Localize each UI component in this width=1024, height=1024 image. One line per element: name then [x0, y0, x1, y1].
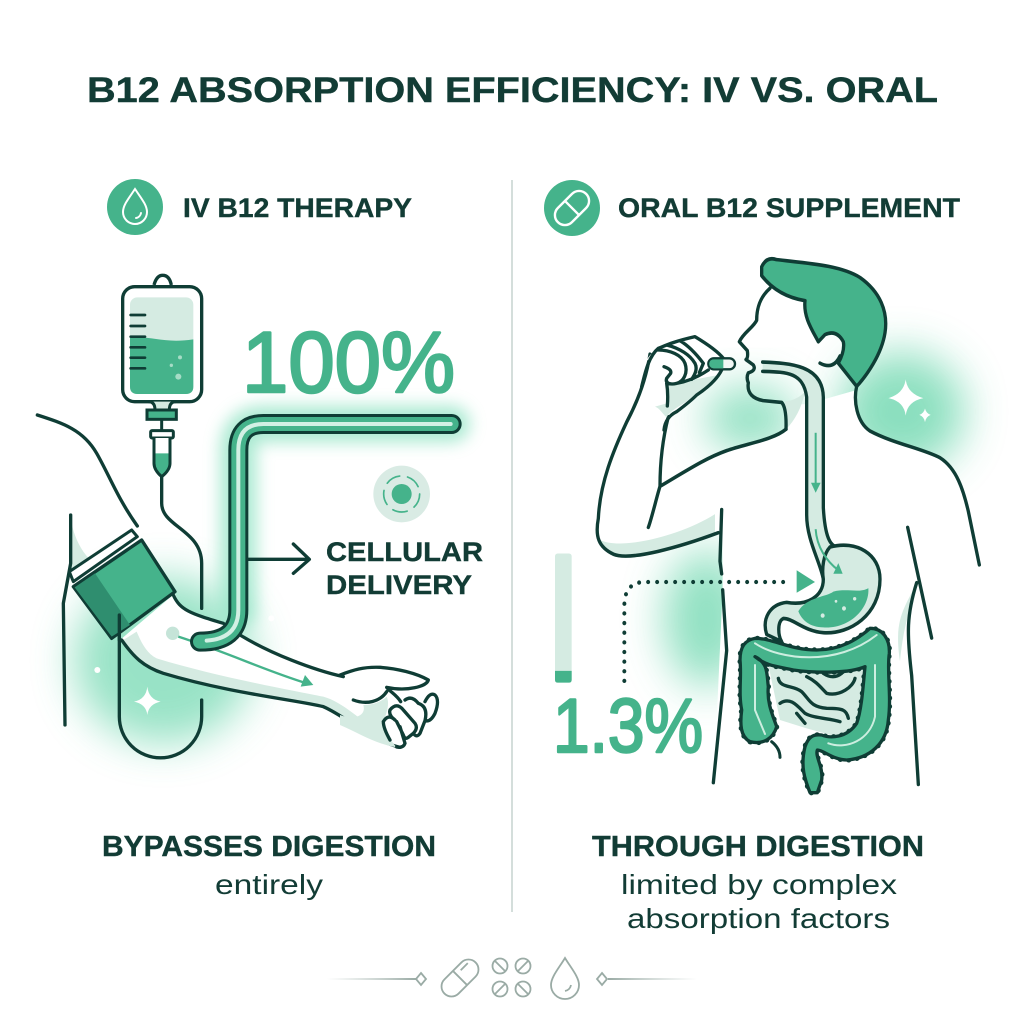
body white — [613, 390, 979, 793]
title: B12 ABSORPTION EFFICIENCY: IV VS. ORAL — [87, 71, 938, 110]
esophagus — [763, 362, 838, 579]
capsule — [708, 358, 735, 369]
icon: tablets — [492, 958, 530, 996]
label: cellular delivery: DELIVERY — [326, 570, 472, 600]
stat: 100%: 100% — [242, 315, 455, 411]
torso outlines — [713, 510, 932, 784]
illustration: person and digestive tract — [555, 259, 979, 793]
icon: capsule badge — [544, 180, 600, 236]
heading: IV B12 therapy: IV B12 THERAPY — [183, 193, 412, 223]
glow: shoulder — [838, 352, 965, 470]
body outlines — [37, 415, 137, 725]
icon: cell — [373, 466, 430, 522]
illustration: intestines — [740, 628, 890, 793]
glow: chest — [703, 386, 797, 451]
arm glow — [73, 577, 253, 743]
raised arm outline — [597, 354, 786, 556]
dots — [94, 615, 274, 673]
IV bag — [123, 275, 202, 477]
stomach — [765, 545, 880, 642]
hair — [762, 259, 886, 386]
side shade — [898, 583, 917, 661]
icon: droplet — [551, 958, 579, 999]
illustration: curled hand — [340, 667, 437, 747]
torso shade — [71, 523, 90, 572]
under-chin shade — [785, 392, 805, 429]
IV line — [119, 477, 202, 758]
caption: through digestion: limited by complex — [621, 869, 897, 900]
caption: through digestion: absorption factors — [627, 903, 890, 934]
icon: water drop badge — [107, 179, 163, 235]
arrow to cellular delivery — [248, 544, 309, 573]
panel: oral B12 supplement — [544, 180, 979, 934]
caption: through digestion — [592, 831, 924, 934]
label: cellular delivery — [326, 537, 483, 600]
fist outline — [642, 337, 723, 430]
flow arrow on arm — [178, 637, 313, 687]
footer icon row — [327, 955, 697, 1001]
caption: bypasses digestion: BYPASSES DIGESTION — [102, 831, 436, 863]
icon: capsule — [437, 955, 483, 1001]
arm outline — [122, 595, 400, 747]
delivery tube — [200, 424, 452, 642]
heading: oral B12 supplement: ORAL B12 SUPPLEMENT — [618, 193, 961, 223]
center divider — [511, 180, 513, 912]
small intestine — [768, 662, 865, 738]
dotted path to stomach — [624, 570, 815, 681]
absorption bar — [555, 553, 572, 683]
hand outline — [340, 667, 437, 747]
stomach contents — [798, 588, 868, 627]
palm shading — [340, 697, 397, 747]
tube glow — [238, 424, 452, 610]
caption: through digestion: THROUGH DIGESTION — [592, 831, 924, 863]
arm shade — [600, 514, 715, 556]
face and shoulder outline — [739, 288, 979, 565]
caption: bypasses digestion: entirely — [215, 869, 323, 900]
blood cuff — [69, 530, 175, 638]
injection site — [166, 627, 179, 640]
cuff line — [114, 615, 124, 640]
panel: IV B12 therapy — [37, 179, 483, 900]
arm shading — [123, 632, 393, 743]
caption: bypasses digestion — [102, 831, 436, 900]
large intestine — [740, 628, 890, 793]
stat: 1.3%: 1.3% — [553, 684, 703, 769]
palm shade — [655, 375, 718, 417]
illustration: IV drip and arm — [37, 275, 452, 758]
esophagus arrows — [811, 433, 843, 574]
hand fill — [647, 337, 723, 410]
arm fill — [120, 593, 439, 747]
sparkle — [134, 687, 161, 715]
label: cellular delivery: CELLULAR — [326, 537, 483, 567]
glow: torso — [663, 551, 750, 686]
sparkles — [888, 379, 931, 422]
raised arm white — [597, 354, 718, 554]
illustration: hand holding capsule — [642, 337, 735, 430]
